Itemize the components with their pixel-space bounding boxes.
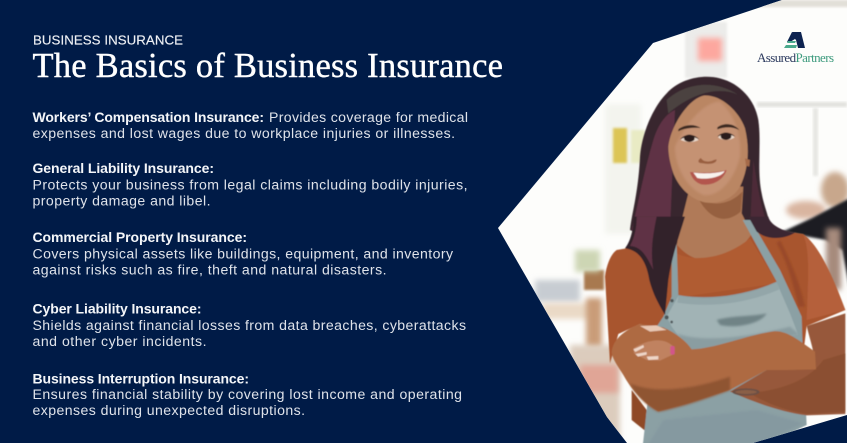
text block: workers' compensation insurance: [32, 109, 468, 141]
text block: general liability insurance: property damage and libel.: [32, 192, 210, 208]
text block: cyber liability insurance: Cyber Liability Insurance:: [32, 300, 202, 316]
text block: cyber liability insurance: and other cyber incidents.: [32, 333, 206, 349]
text block: general liability insurance: [32, 160, 468, 208]
long hair over shoulder: [625, 217, 795, 315]
crossed arms: [612, 313, 845, 415]
shirt: [605, 227, 845, 431]
apron: [643, 220, 807, 445]
blurred cafe background: [535, 0, 848, 445]
text block: workers' compensation insurance: Provides coverage for medical: [269, 109, 468, 125]
text block: general liability insurance: General Liability Insurance:: [32, 160, 214, 176]
title: The Basics of Business Insurance: [32, 47, 503, 85]
eyes: [681, 136, 699, 142]
nose: [698, 158, 717, 164]
logo wordmark: AssuredPartners: [757, 50, 834, 65]
eyebrow heading: BUSINESS INSURANCE: [33, 32, 183, 48]
eyebrows: [678, 125, 701, 131]
text block: commercial property insurance: [32, 229, 454, 278]
text block: workers' compensation insurance: expenses and lost wages due to workplace injuries or illnesses.: [32, 125, 455, 141]
text block: commercial property insurance: Covers physical assets like buildings, equipment, and inventory: [32, 246, 454, 262]
photo: smiling woman in apron: [490, 0, 848, 445]
neck: [676, 186, 752, 259]
text block: cyber liability insurance: [32, 300, 466, 349]
face: [668, 96, 750, 203]
text block: business interruption insurance: expenses during unexpected disruptions.: [32, 402, 305, 418]
text block: general liability insurance: Protects your business from legal claims including bodily injuries,: [32, 176, 468, 192]
icon: logo A mark: [784, 32, 805, 48]
blurred person at right: [821, 172, 848, 208]
lips and teeth: [690, 170, 727, 185]
logo: AssuredPartners: [757, 32, 834, 65]
text block: business interruption insurance: Business Interruption Insurance:: [32, 370, 249, 386]
text block: commercial property insurance: against risks such as fire, theft and natural disasters.: [32, 262, 386, 278]
text block: cyber liability insurance: Shields against financial losses from data breaches, cyberattacks: [32, 317, 466, 333]
text block: business interruption insurance: Ensures financial stability by covering lost income and operating: [32, 386, 462, 402]
text block: workers' compensation insurance: Workers’ Compensation Insurance:: [32, 109, 264, 125]
hair back: [630, 77, 771, 247]
text block: commercial property insurance: Commercial Property Insurance:: [32, 229, 247, 245]
text block: business interruption insurance: [32, 370, 462, 418]
